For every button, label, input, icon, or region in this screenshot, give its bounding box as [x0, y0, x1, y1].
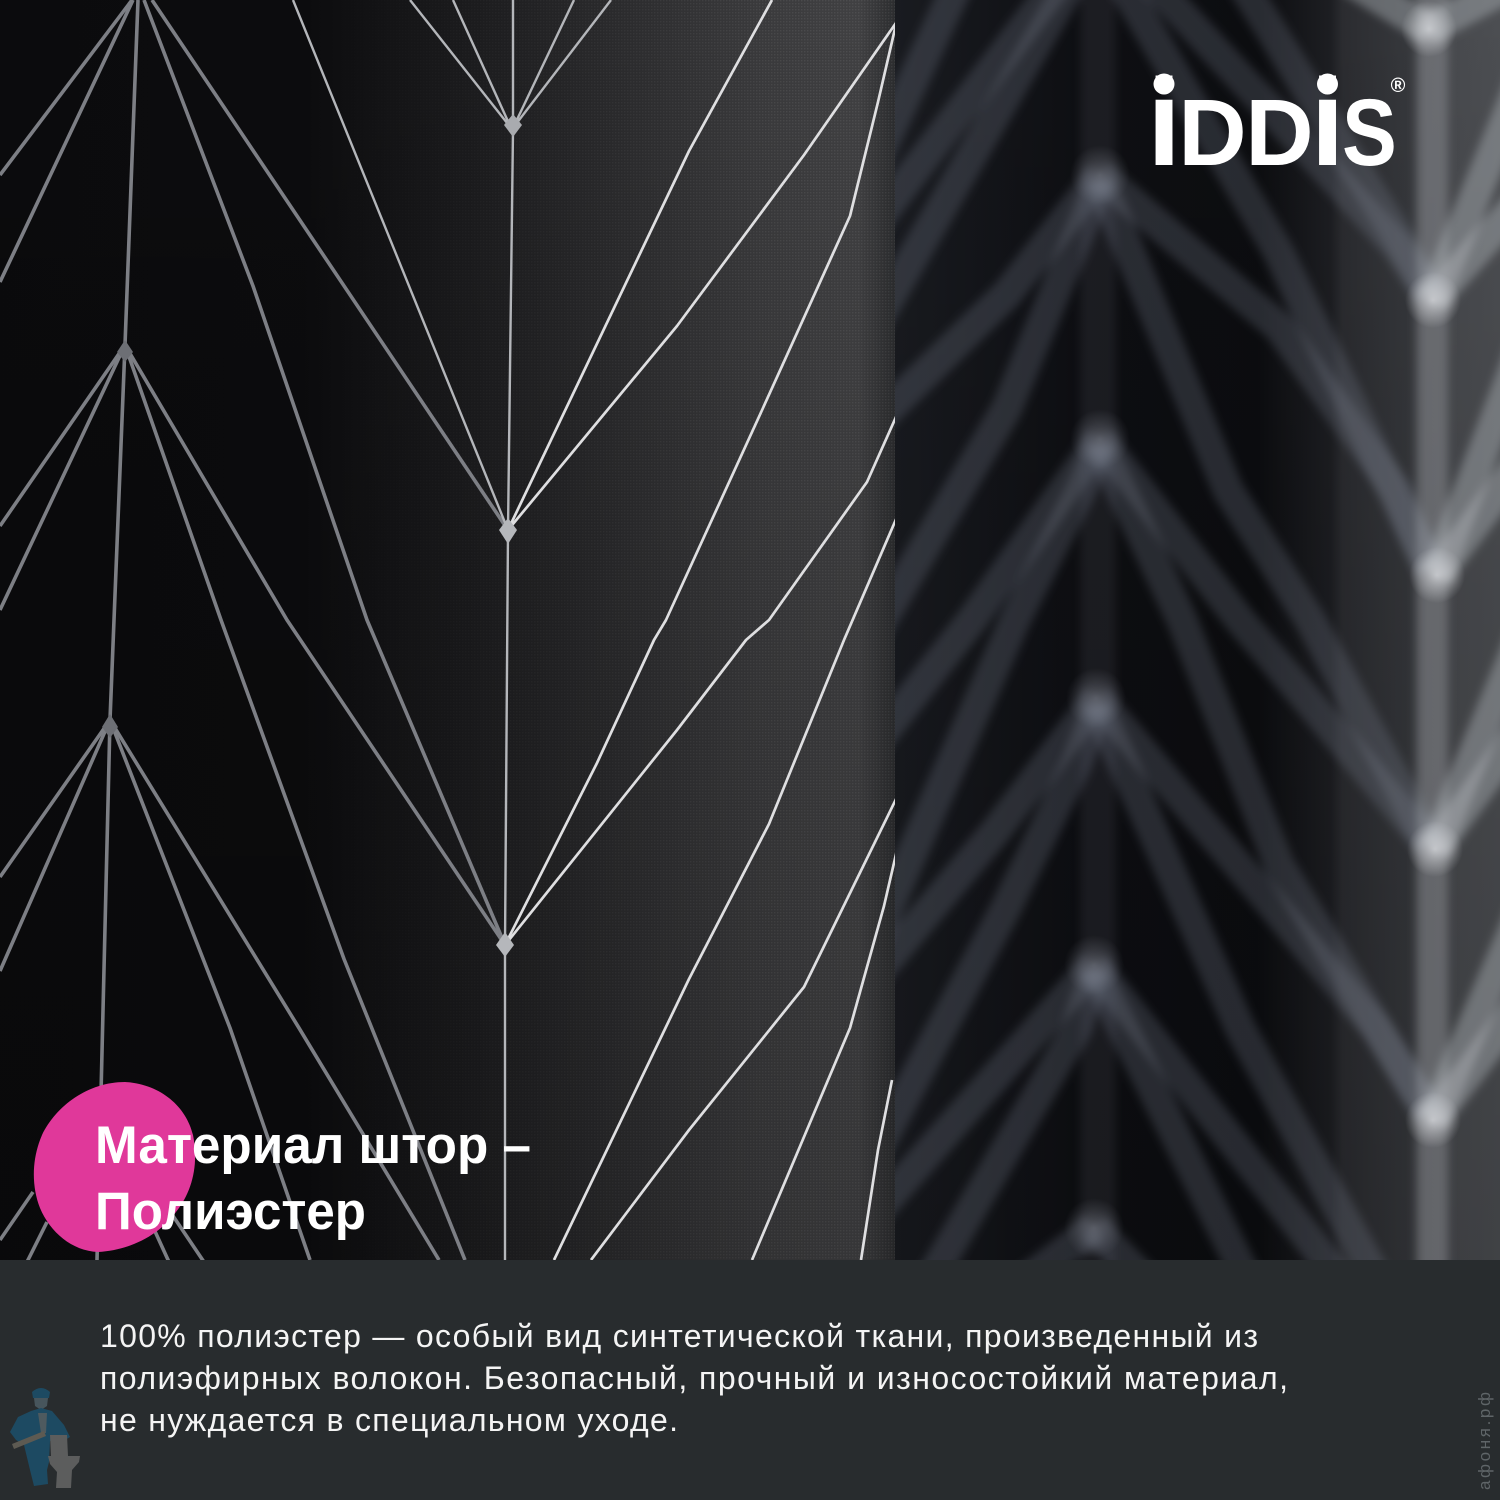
description text	[100, 1318, 1288, 1438]
description panel	[0, 1260, 1500, 1500]
heading	[95, 1116, 531, 1241]
background curtain out of focus	[868, 0, 1500, 1285]
watermark text: site name: афоня.рф	[1475, 1392, 1494, 1490]
description text: не нуждается в специальном уходе.	[100, 1402, 678, 1438]
logo: iddis: ®	[1391, 75, 1406, 97]
logo: iddis: D	[1245, 80, 1314, 186]
description text: 100% полиэстер — особый вид синтетической ткани, произведенный из	[100, 1318, 1258, 1354]
heading: Материал штор –	[95, 1116, 531, 1175]
watermark icon: plumber with toilet	[10, 1388, 80, 1488]
heading accent: pink blob	[34, 1082, 195, 1252]
foreground curtain with line pattern	[0, 0, 900, 1262]
logo: iddis: i	[1147, 55, 1181, 192]
heading: Полиэстер	[95, 1182, 366, 1241]
logo: iddis: D	[1178, 80, 1247, 186]
description text: полиэфирных волокон. Безопасный, прочный и износостойкий материал,	[100, 1360, 1288, 1396]
logo: iddis	[1147, 55, 1406, 192]
logo: iddis: i	[1310, 55, 1345, 192]
logo: iddis: S	[1342, 80, 1397, 185]
